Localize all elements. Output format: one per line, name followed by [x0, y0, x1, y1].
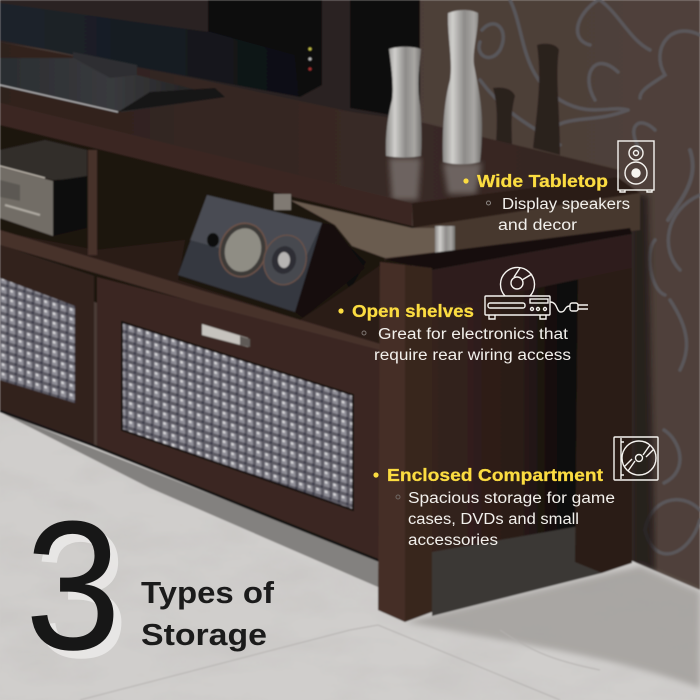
- floor shadow right of leg: [405, 566, 700, 688]
- TV back: [208, 0, 322, 97]
- heading: types of storage: [141, 575, 275, 652]
- drawer base line: [0, 411, 380, 561]
- callout: wide tabletop: [463, 171, 630, 234]
- callout: open shelves: require rear wiring access: [374, 347, 571, 364]
- tabletop surface: [0, 42, 620, 203]
- wall strip behind tabletop base: [0, 42, 73, 60]
- vase reflections: [389, 158, 421, 200]
- main drawer mesh: [122, 322, 353, 510]
- dark reflection above TV: [0, 0, 420, 125]
- wall seen through shelves: [290, 200, 436, 258]
- shelf top: [0, 232, 385, 345]
- callout: enclosed compartment: [373, 465, 615, 549]
- callout: wide tabletop: Display speakers: [502, 196, 630, 213]
- black panel behind vases: [350, 0, 420, 120]
- callout: enclosed compartment: Spacious storage for game: [408, 490, 615, 507]
- big numeral 3 with shadow: 3: [33, 490, 129, 696]
- shelf interior: [0, 125, 420, 400]
- callout: wide tabletop: and decor: [498, 217, 577, 234]
- shelf front rail: [0, 230, 384, 358]
- icon: disc case: [614, 437, 658, 480]
- receiver: [0, 140, 87, 236]
- floor under cabinet: [432, 526, 602, 616]
- black wedge beside speaker: [340, 247, 366, 290]
- callout: enclosed compartment: Enclosed Compartment: [387, 465, 603, 485]
- floor marble texture: [0, 415, 700, 700]
- TV stand base: [0, 58, 225, 112]
- callout: open shelves: [338, 301, 571, 364]
- tabletop front edge: [0, 103, 412, 228]
- small vase: [386, 47, 422, 158]
- vase shadows on wall: [533, 44, 560, 155]
- drawer handle: [202, 324, 248, 347]
- heading: types of storage: Storage: [141, 617, 267, 652]
- wall seen below tabletop: [384, 193, 640, 260]
- callout: wide tabletop: Wide Tabletop: [477, 171, 608, 191]
- big numeral 3 with shadow: 3: [25, 482, 121, 688]
- TV ports: [308, 48, 312, 50]
- tabletop side edge: [412, 177, 640, 228]
- left drawer: [0, 245, 94, 445]
- upper frame rail: [432, 234, 632, 310]
- cabinet side panel: [432, 265, 580, 552]
- tall vase: [443, 10, 482, 164]
- front leg: [378, 262, 432, 622]
- chrome post: [435, 226, 455, 256]
- TV stand neck: [73, 52, 137, 78]
- main drawer: [97, 277, 380, 560]
- heading: types of storage: Types of: [141, 575, 275, 610]
- shelf divider: [88, 150, 97, 255]
- wall shadow beside cabinet: [630, 195, 655, 575]
- floor tile joints: [80, 625, 600, 700]
- icon: DVD player: [485, 267, 588, 319]
- left drawer mesh: [0, 278, 75, 403]
- floor shadow under drawers: [0, 412, 378, 587]
- callout: open shelves: Open shelves: [352, 301, 474, 321]
- callout: enclosed compartment: cases, DVDs and small: [408, 511, 579, 528]
- TV lower bezel: [0, 3, 300, 97]
- speaker on shelf: [178, 195, 365, 318]
- floor: [0, 410, 700, 700]
- callout: enclosed compartment: accessories: [408, 532, 498, 549]
- back leg: [575, 262, 632, 573]
- wall damask pattern: [479, 0, 700, 554]
- icon: speaker: [618, 141, 654, 192]
- callout: open shelves: Great for electronics that: [378, 326, 569, 343]
